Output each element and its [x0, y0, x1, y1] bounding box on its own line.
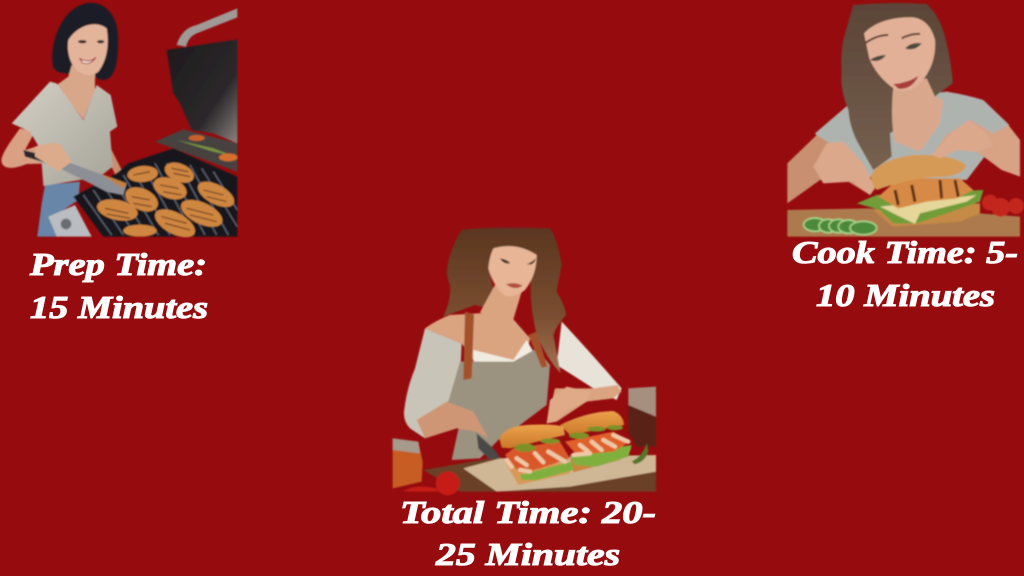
- sandwich right: [560, 411, 632, 472]
- facial features: [500, 258, 536, 288]
- hands: [813, 120, 993, 195]
- neck and chest: [892, 78, 943, 152]
- face: [864, 17, 935, 91]
- arms: [1, 128, 72, 168]
- grill lid: [167, 8, 237, 143]
- sandwich base: [873, 203, 980, 227]
- heading: total time: Total Time: 20-: [400, 494, 656, 530]
- hair: [841, 3, 953, 170]
- grill body: [73, 148, 237, 237]
- grilled chicken: [878, 178, 973, 208]
- hand: [547, 387, 590, 423]
- paper: [463, 455, 656, 492]
- panel: cook time: [787, 3, 1024, 313]
- right sleeve: [557, 322, 622, 400]
- pickle: [632, 443, 648, 464]
- panel: prep time: [1, 3, 238, 325]
- shirt: [12, 82, 117, 186]
- grill stripes on chicken: [105, 168, 227, 230]
- apron: [448, 348, 550, 460]
- illustration: woman grilling chicken: [1, 3, 238, 243]
- right arm: [547, 385, 622, 423]
- heading: prep time: Prep Time:: [29, 246, 207, 282]
- left sleeve: [404, 328, 462, 438]
- right jar: [628, 387, 656, 447]
- top bun: [871, 155, 966, 190]
- right arm: [932, 120, 1020, 177]
- sandwich left: [499, 424, 573, 485]
- face: [488, 246, 537, 296]
- illustration: woman slicing sandwiches: [393, 228, 656, 495]
- jeans: [37, 182, 80, 237]
- cutting board: [787, 208, 1020, 237]
- knife: [477, 433, 505, 465]
- control panel: [48, 205, 92, 237]
- left arm: [787, 135, 875, 203]
- neck and chest: [57, 65, 95, 119]
- grill grates: [83, 163, 237, 235]
- left arm: [417, 402, 488, 438]
- neck: [480, 285, 522, 325]
- hair: [443, 228, 566, 373]
- cucumber slices: [804, 218, 877, 235]
- heading: cook time: Cook Time: 5-: [792, 234, 1018, 270]
- panel: total time: [393, 228, 656, 572]
- cheese: [880, 195, 977, 224]
- chicken pieces: [95, 159, 238, 243]
- facial features: [78, 40, 104, 64]
- apron straps: [463, 312, 547, 380]
- tongs: [23, 150, 127, 195]
- chest: [425, 312, 530, 362]
- tomatoes: [982, 195, 1024, 217]
- lettuce: [857, 190, 983, 223]
- left jar: [393, 438, 423, 488]
- cutting board: [423, 455, 656, 492]
- camisole: [473, 340, 533, 363]
- hair: [52, 3, 118, 80]
- face: [68, 24, 108, 75]
- value: total time: 25 Minutes: [435, 536, 620, 572]
- upper rack: [155, 129, 238, 172]
- hand: [35, 143, 72, 172]
- tomatoes: [403, 471, 460, 495]
- shirt: [815, 92, 1009, 180]
- value: prep time: 15 Minutes: [30, 289, 208, 325]
- illustration: woman assembling sandwich: [787, 3, 1024, 237]
- value: cook time: 10 Minutes: [816, 277, 995, 313]
- facial features: [865, 34, 922, 89]
